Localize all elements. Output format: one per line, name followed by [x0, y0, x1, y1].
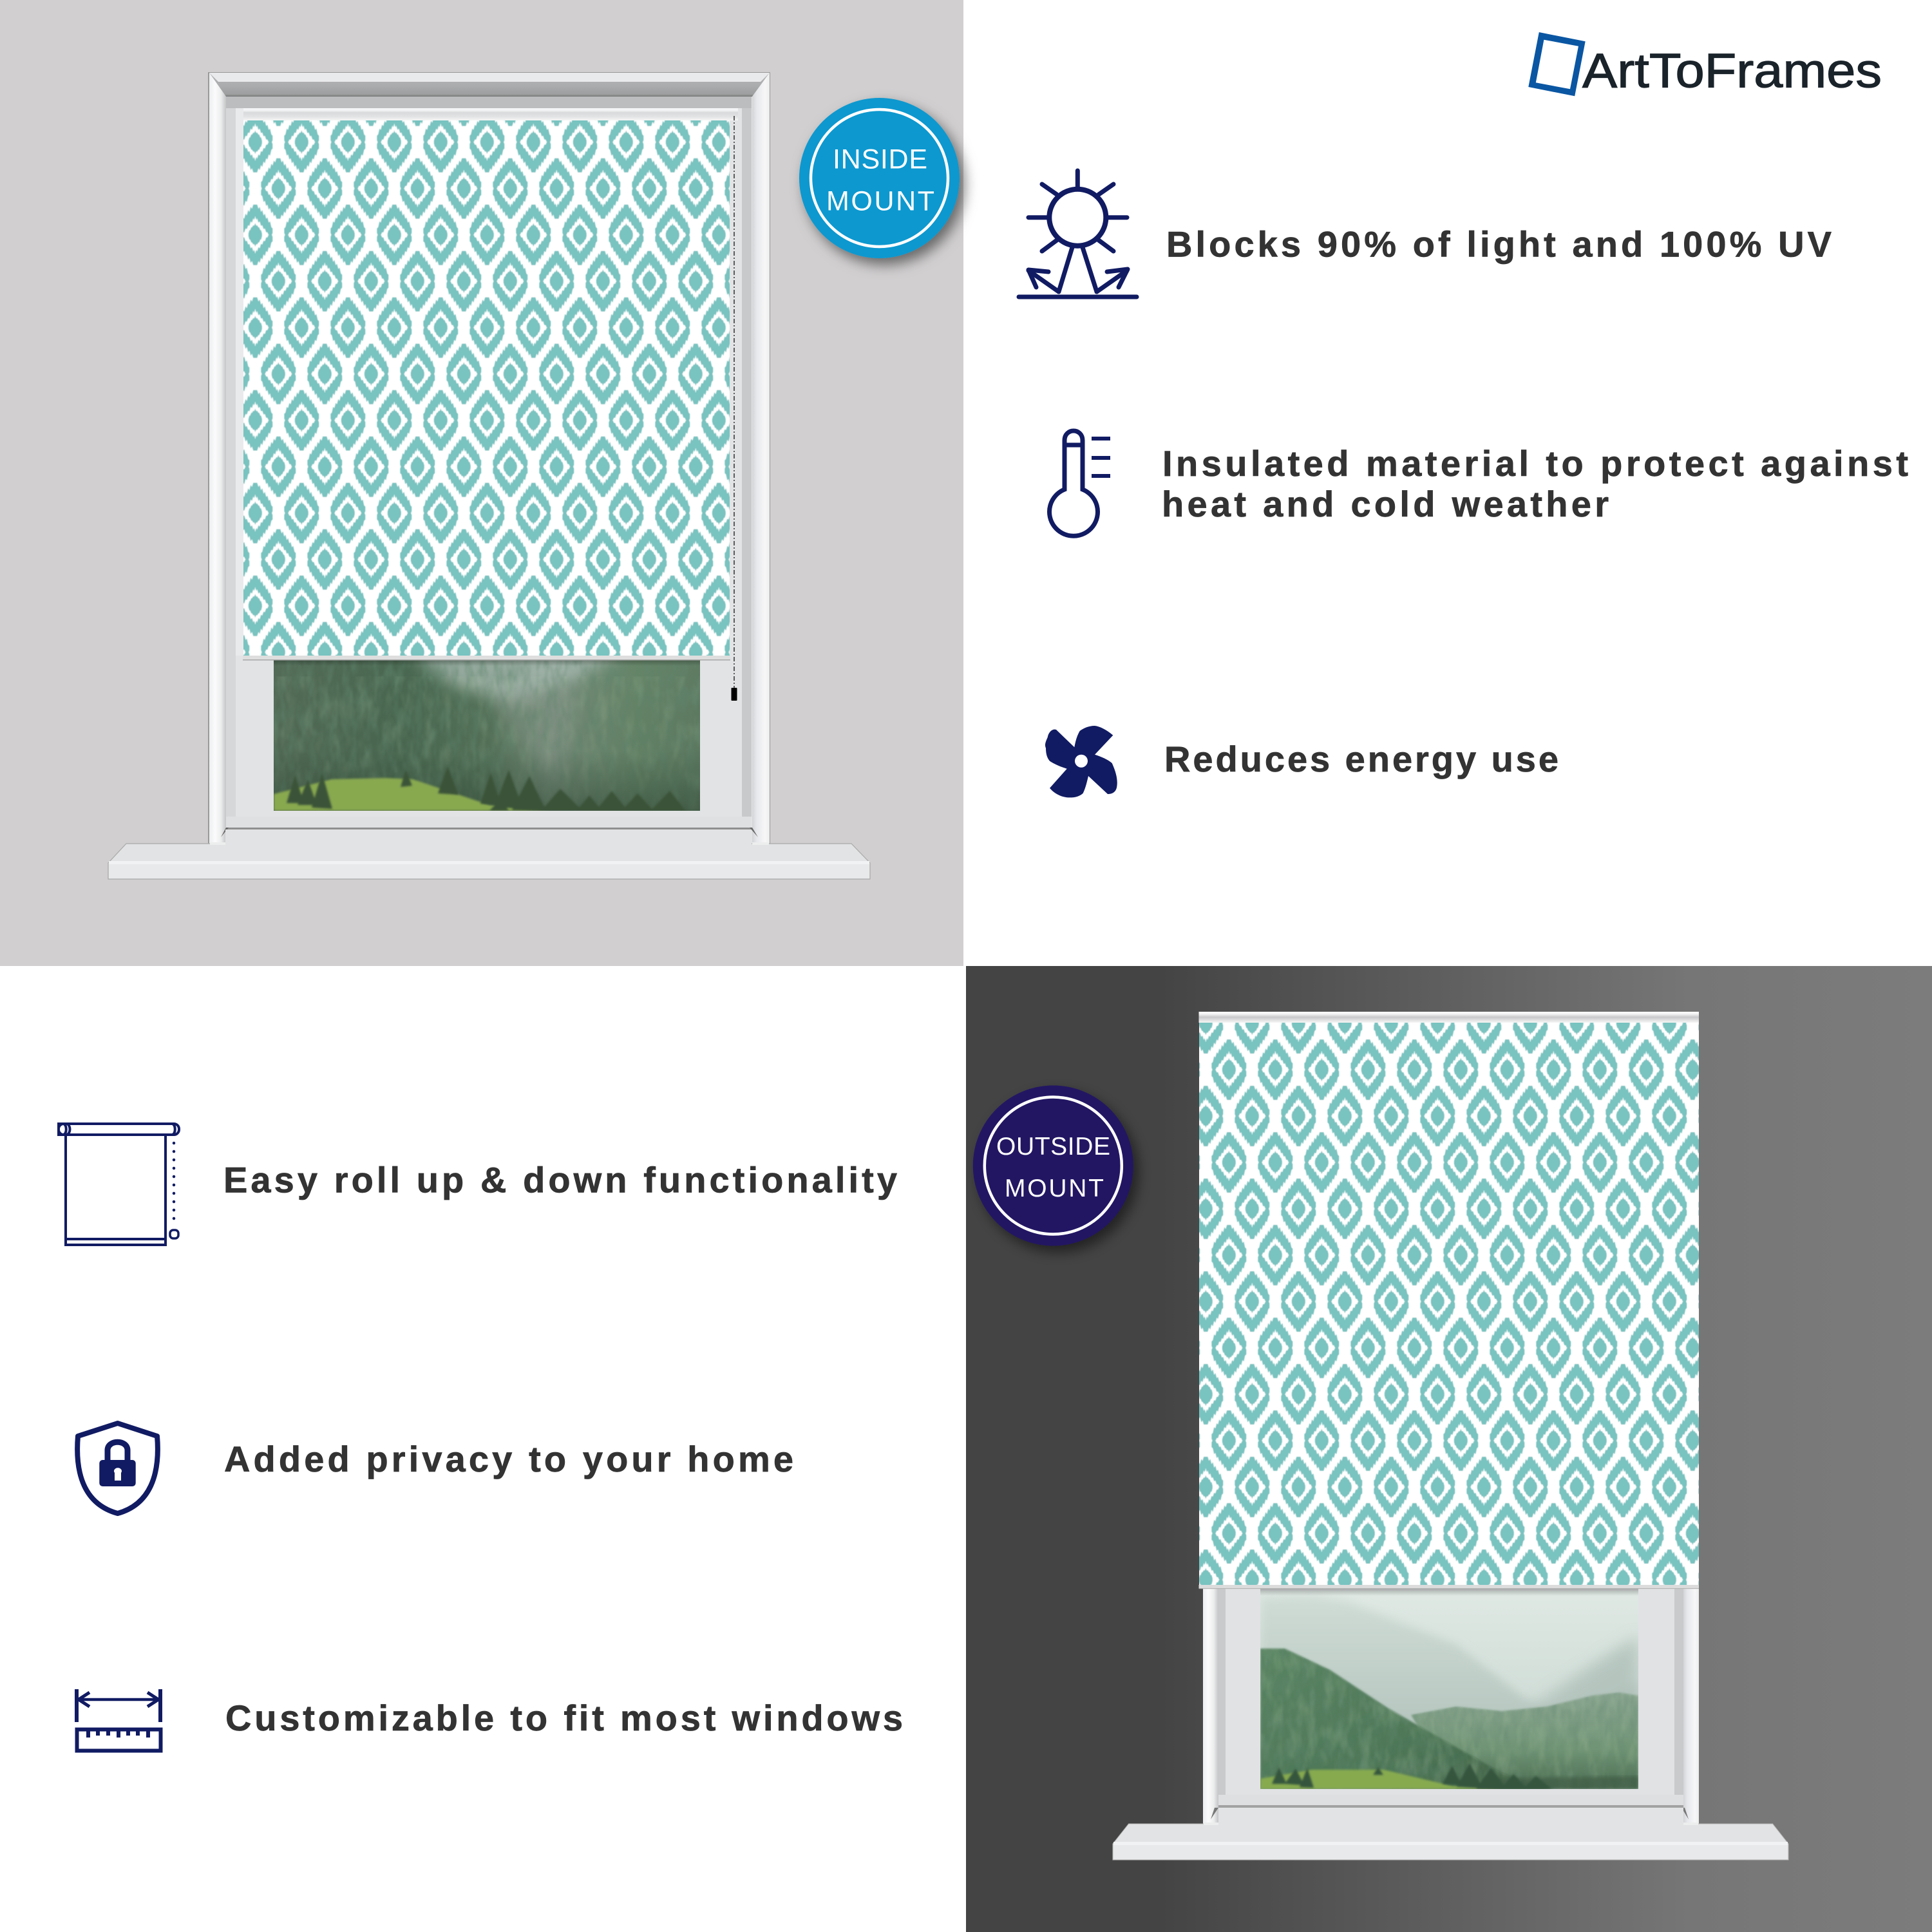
icon: thermometer: [1050, 431, 1110, 536]
icon: shield with padlock: [77, 1423, 158, 1513]
logo: ArtToFrames: [1528, 32, 1882, 98]
badge: inside mount: [799, 98, 960, 258]
icon: measuring width and ruler: [77, 1689, 161, 1750]
text: insulated material: heat and cold weather: [1162, 484, 1609, 524]
text: insulated material: Insulated material to protect against: [1162, 443, 1908, 484]
text: energy use: Reduces energy use: [1164, 739, 1558, 779]
badge: outside mount: OUTSIDE: [996, 1133, 1110, 1160]
roller shade fabric: teal ikat pattern: [238, 116, 734, 661]
icon: sun blocked by surface: [1019, 171, 1137, 297]
roller shade fabric: teal ikat pattern: [1194, 1018, 1704, 1589]
badge: outside mount: MOUNT: [1005, 1175, 1104, 1202]
pull cord with tassel: [732, 116, 737, 701]
text: customizable: Customizable to fit most windows: [225, 1698, 903, 1738]
roller shade headrail: [236, 108, 738, 656]
icon: roller shade: [59, 1124, 179, 1245]
badge: inside mount: MOUNT: [826, 186, 934, 217]
text: roll up and down: Easy roll up & down functionality: [223, 1159, 897, 1200]
window view: misty mountains photo: [1260, 1591, 1638, 1789]
shade bottom bar: [243, 656, 730, 666]
badge: outside mount: [973, 1086, 1133, 1245]
panel: outside mount window on dark wall: [966, 966, 1932, 1932]
text: light and UV blocking: Blocks 90% of light and 100% UV: [1166, 224, 1832, 264]
window view: foggy forest photo: [274, 654, 700, 811]
shade bottom bar: [1199, 1585, 1699, 1589]
window sill: [1113, 1808, 1788, 1860]
panel: white feature panel: [0, 966, 966, 1932]
logo: ArtToFrames: ArtToFrames: [1582, 44, 1882, 98]
panel: inside mount window on grey wall: [0, 0, 963, 966]
badge: inside mount: INSIDE: [833, 144, 927, 175]
icon: fan: [1045, 726, 1117, 797]
roller shade headrail: [1199, 1012, 1699, 1023]
text: insulated material: [1162, 443, 1908, 524]
text: privacy: Added privacy to your home: [224, 1439, 793, 1479]
window sill: [108, 829, 870, 879]
